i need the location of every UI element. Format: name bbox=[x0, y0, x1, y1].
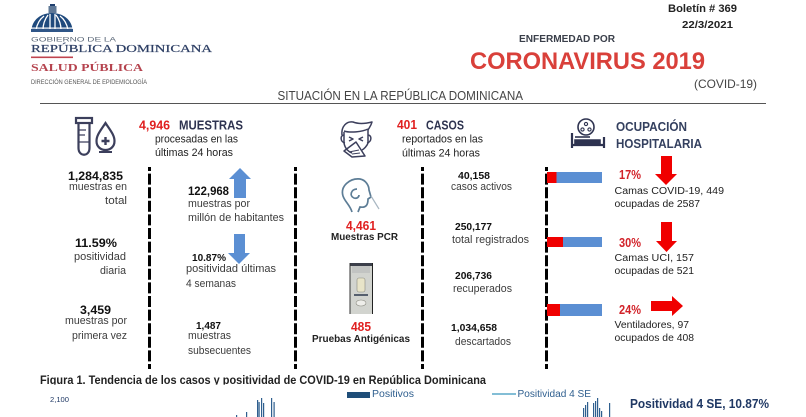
icon: PCR nasal swab bbox=[342, 179, 379, 212]
stat: muestras PCR: Muestras PCR bbox=[331, 231, 398, 243]
callout: camas UCI: Camas UCI, 157 bbox=[614, 253, 694, 264]
bars: positive cases, left cluster bbox=[236, 398, 275, 417]
axis label: 2,100 bbox=[50, 395, 69, 404]
stat: descartados bbox=[451, 323, 511, 348]
heading: casos reportados bbox=[397, 118, 483, 160]
bar: camas COVID-19 17% bbox=[547, 172, 602, 183]
icon: person with face mask bbox=[341, 122, 372, 157]
stat: pruebas antigénicas: 485 bbox=[351, 320, 371, 334]
callout: ventiladores: Ventiladores, 97 bbox=[614, 320, 689, 331]
stat: positividad últimas 4 semanas bbox=[186, 253, 277, 290]
stat: muestras subsecuentes bbox=[188, 321, 251, 357]
icon: hospital bed with virus bbox=[572, 119, 604, 148]
stat: muestras en total: muestras en bbox=[69, 181, 127, 193]
icon: antigen test cassette bbox=[350, 263, 373, 314]
callout: camas UCI: 30% bbox=[619, 236, 641, 250]
stat: pruebas antigénicas: Pruebas Antigénicas bbox=[312, 333, 410, 345]
callout: camas COVID-19 bbox=[614, 156, 724, 210]
stat: positividad diaria bbox=[74, 236, 127, 277]
stat: recuperados: recuperados bbox=[453, 283, 512, 295]
stat: muestras por primera vez: muestras por bbox=[65, 315, 127, 327]
stat: positividad diaria: positividad bbox=[74, 251, 126, 263]
panel: casos bbox=[312, 118, 529, 348]
stat: total registrados: 250,177 bbox=[455, 222, 492, 233]
heading: casos reportados: 401 bbox=[397, 118, 417, 132]
chart annotation: Positividad 4 SE, 10.87% bbox=[630, 396, 769, 411]
stat: muestras por millón de habitantes: millón de habitantes bbox=[188, 212, 284, 224]
stat: positividad diaria: diaria bbox=[100, 265, 127, 277]
figure caption: Figura 1. Tendencia de los casos y positividad de COVID-19 en República Dominicana bbox=[40, 375, 487, 387]
bars: positive cases, right cluster bbox=[583, 398, 610, 417]
stat: recuperados bbox=[453, 271, 512, 295]
stat: positividad últimas 4 semanas: 10.87% bbox=[192, 253, 226, 264]
stat: muestras PCR: 4,461 bbox=[346, 219, 376, 233]
stat: muestras PCR bbox=[331, 219, 398, 243]
stat: recuperados: 206,736 bbox=[455, 271, 492, 282]
heading: casos reportados: reportados en las bbox=[402, 134, 483, 146]
callout: ventiladores bbox=[614, 296, 694, 344]
callout: camas UCI: ocupadas de 521 bbox=[614, 266, 694, 277]
heading: ocupación hospitalaria: HOSPITALARIA bbox=[616, 137, 702, 151]
heading: ocupación hospitalaria: OCUPACIÓN bbox=[616, 119, 687, 134]
heading: muestras procesadas: procesadas en las bbox=[155, 134, 238, 146]
title: (COVID-19) bbox=[694, 77, 757, 91]
callout: ventiladores: 24% bbox=[619, 303, 641, 317]
stat: descartados: 1,034,658 bbox=[451, 323, 497, 334]
heading: casos reportados: CASOS bbox=[426, 118, 464, 132]
stat: muestras por primera vez: 3,459 bbox=[80, 303, 111, 317]
stat: total registrados: total registrados bbox=[452, 234, 529, 246]
stat: muestras subsecuentes: muestras bbox=[188, 330, 231, 342]
stat: muestras subsecuentes: 1,487 bbox=[196, 321, 221, 332]
stat: muestras en total bbox=[68, 169, 127, 207]
stat: casos activos: 40,158 bbox=[458, 171, 490, 182]
callout: ventiladores: ocupados de 408 bbox=[614, 333, 694, 344]
bulletin number and date: Boletín # 369 bbox=[668, 3, 737, 15]
stat: descartados: descartados bbox=[455, 336, 511, 348]
subtitle: SITUACIÓN EN LA REPÚBLICA DOMINICANA bbox=[278, 88, 523, 103]
stat: muestras subsecuentes: subsecuentes bbox=[188, 345, 251, 357]
stat: muestras por millón de habitantes: 122,968 bbox=[188, 186, 230, 198]
bar: camas UCI 30% bbox=[547, 237, 602, 247]
stat: muestras por primera vez bbox=[65, 303, 127, 342]
arrow: up bbox=[229, 168, 251, 198]
panel: muestras bbox=[65, 118, 284, 357]
bulletin number and date bbox=[668, 3, 737, 31]
text: Dirección General de Epidemiología: DIRECCIÓN GENERAL DE EPIDEMIOLOGÍA bbox=[31, 79, 147, 86]
legend: positividad 4 SE: Positividad 4 SE bbox=[518, 389, 591, 400]
callout: camas UCI bbox=[614, 222, 694, 277]
panel: ocupación hospitalaria bbox=[547, 119, 724, 344]
callout: camas COVID-19: ocupadas de 2587 bbox=[614, 199, 700, 210]
bulletin number and date: 22/3/2021 bbox=[682, 19, 733, 31]
text: Salud Pública: SALUD PÚBLICA bbox=[31, 62, 144, 74]
stat: casos activos: casos activos bbox=[451, 181, 512, 193]
heading: muestras procesadas: 4,946 bbox=[139, 118, 170, 132]
stat: muestras por millón de habitantes bbox=[188, 186, 284, 224]
arrow: down bbox=[228, 234, 250, 264]
chart: cases and positivity trend (cropped) bbox=[50, 389, 769, 417]
callout: camas COVID-19: 17% bbox=[619, 168, 641, 182]
icon: test tube and blood drop bbox=[76, 118, 114, 155]
stat: total registrados bbox=[452, 222, 529, 246]
stat: casos activos bbox=[451, 171, 512, 193]
bar: ventiladores 24% bbox=[547, 304, 602, 316]
title bbox=[470, 33, 757, 91]
stat: positividad últimas 4 semanas: 4 semanas bbox=[186, 278, 236, 290]
stat: positividad últimas 4 semanas: positividad últimas bbox=[186, 263, 277, 275]
legend: positivos bbox=[347, 389, 414, 400]
text: Gobierno de la: GOBIERNO DE LA bbox=[31, 36, 117, 44]
logo: Gobierno de la República Dominicana, Salud Pública bbox=[31, 4, 213, 86]
text: República Dominicana: REPÚBLICA DOMINICANA bbox=[31, 43, 213, 55]
stat: muestras en total: total bbox=[105, 195, 127, 207]
heading: casos reportados: últimas 24 horas bbox=[402, 148, 480, 160]
callout: camas COVID-19: Camas COVID-19, 449 bbox=[614, 186, 724, 197]
title: ENFERMEDAD POR bbox=[519, 33, 615, 45]
stat: muestras por primera vez: primera vez bbox=[72, 330, 127, 342]
stat: muestras por millón de habitantes: muestras por bbox=[188, 198, 250, 210]
stat: pruebas antigénicas bbox=[312, 320, 410, 345]
legend: positivos: Positivos bbox=[372, 389, 414, 400]
stat: muestras en total: 1,284,835 bbox=[68, 169, 123, 183]
stat: positividad diaria: 11.59% bbox=[75, 236, 117, 250]
icon: dome bbox=[31, 4, 73, 32]
heading: muestras procesadas: MUESTRAS bbox=[179, 118, 243, 132]
heading: muestras procesadas: últimas 24 horas bbox=[155, 147, 233, 159]
title: CORONAVIRUS 2019 bbox=[470, 48, 705, 75]
heading: ocupación hospitalaria bbox=[616, 119, 702, 151]
heading: muestras procesadas bbox=[139, 118, 243, 159]
